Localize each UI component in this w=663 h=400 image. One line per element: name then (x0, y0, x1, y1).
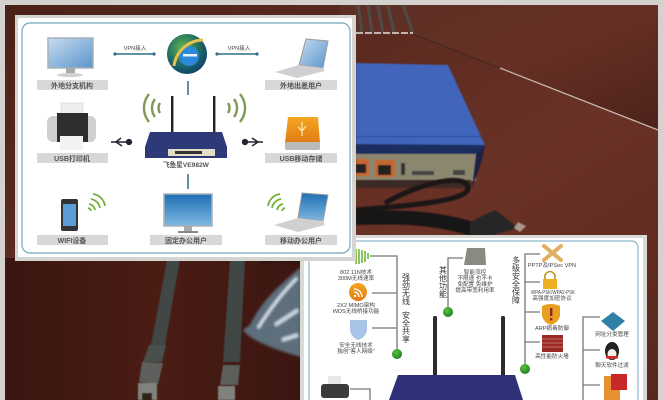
heading: multi-level security: 保 (512, 287, 520, 297)
heading: other functions: 功 (439, 281, 447, 291)
icon: VPN crossed tools (544, 246, 561, 260)
icon: USB printer (47, 103, 96, 150)
heading: strong wireless, safe sharing: 全 (402, 318, 410, 328)
label: router model: 飞鱼星VE982W (163, 160, 210, 169)
icon: security shield (350, 320, 367, 340)
label: wifi device: WIFI设备 (58, 236, 86, 245)
label: USB storage: USB移动存储 (280, 154, 322, 163)
text: URL filter: 网址分类管理 (595, 330, 629, 338)
text: no config: 免配置 免维护 (457, 280, 493, 288)
status dot: security (520, 364, 530, 374)
group: strong wireless features (333, 249, 410, 359)
label: mobile office user (265, 235, 337, 245)
heading: strong wireless, safe sharing: 强 (402, 273, 410, 282)
status dot: wireless (392, 349, 402, 359)
heading: strong wireless, safe sharing: 享 (402, 334, 410, 344)
photo: two antennas (138, 260, 245, 400)
arrow: router to desktop (187, 174, 189, 189)
icon: wifi wedge left (88, 194, 105, 211)
heading: strong wireless, safe sharing: 无 (402, 289, 410, 298)
label: fixed office user (150, 235, 222, 245)
label: fixed office user: 固定办公用户 (165, 236, 207, 245)
label: mobile office user: 移动办公用户 (280, 236, 322, 245)
icon: padlock (543, 272, 557, 289)
heading: strong wireless, safe sharing: 安 (402, 310, 410, 320)
icon: QQ penguin (605, 342, 619, 360)
text: MIMO: 2X2 MIMO架构 (337, 301, 375, 309)
heading: multi-level security: 障 (512, 295, 520, 305)
icon: ARP warning shield (542, 304, 560, 325)
text: 802.11N: 802.11N技术 (340, 268, 372, 276)
icon: USB storage drive (285, 117, 320, 150)
label: wifi device (37, 235, 108, 245)
icon: wifi phone (61, 199, 78, 231)
icon: wifi wedge right (268, 194, 285, 211)
label: USB printer: USB打印机 (54, 154, 90, 163)
icon: wifi waves left (144, 94, 160, 122)
icon: USB symbol right (243, 138, 263, 146)
icon: printer lower diagram (321, 376, 370, 400)
icon: firewall bricks (542, 335, 563, 352)
text: chat filter: 聊天软件过滤 (595, 361, 629, 369)
text: firewall: 高性能防火墙 (535, 352, 569, 360)
arrow: VPN left (113, 44, 156, 56)
heading: other functions: 其 (439, 266, 447, 275)
connector line: other functions (448, 258, 463, 307)
panel: product features diagram (300, 235, 647, 400)
heading: strong wireless, safe sharing: 共 (402, 327, 410, 336)
text: PPTP: PPTP及IPSec VPN (528, 262, 576, 269)
icon: traffic control box (464, 248, 486, 265)
connector lines: management (583, 317, 600, 400)
label: USB storage (265, 153, 337, 163)
text: bandwidth: 提高带宽利用率 (455, 286, 495, 294)
heading: strong wireless, safe sharing: 劲 (402, 280, 410, 290)
panel: network topology diagram (15, 15, 356, 261)
heading: multi-level security: 级 (512, 263, 520, 273)
arrow: VPN right (215, 44, 259, 56)
text: encryption: 高强度加密协议 (532, 294, 572, 302)
heading: strong wireless, safe sharing: 线 (402, 296, 410, 306)
heading: other functions: 能 (439, 289, 447, 299)
icon: flame firewall (604, 374, 627, 400)
text: smart traffic control: 智能流控 (464, 268, 487, 276)
icon: wifi waves right (228, 94, 245, 122)
connector lines: security (525, 254, 540, 364)
arrow: VPN left: VPN接入 (124, 44, 147, 52)
heading: strong wireless, safe sharing (402, 273, 410, 344)
icon: mobile office laptop (274, 193, 328, 232)
label: remote branch: 外地分支机构 (51, 81, 93, 90)
icon: router with antennas (145, 96, 227, 158)
heading: multi-level security: 安 (512, 271, 520, 281)
text: 300M: 300M无线速率 (338, 274, 375, 282)
connector lines: wireless (372, 256, 397, 349)
icon: internet globe (167, 34, 207, 74)
heading: other functions: 他 (439, 273, 447, 283)
photo: cable in plastic bag (243, 259, 301, 357)
label: USB printer (37, 153, 108, 163)
group: other functions (439, 248, 495, 317)
label: remote branch (37, 80, 108, 90)
router illustration: lower diagram (389, 316, 523, 400)
status dot: other functions (443, 307, 453, 317)
icon: travelling user laptop (275, 39, 328, 78)
text: WPA: WPA-PSK/WPA2-PSK (531, 290, 575, 296)
heading: multi-level security: 全 (512, 279, 520, 289)
text: secure wireless: 安全无线技术 (339, 341, 373, 349)
label: travelling user: 外地出差用户 (280, 81, 322, 90)
heading: other functions (439, 266, 447, 299)
group: behaviour management (583, 312, 629, 400)
photo: black power cable and plug (356, 180, 526, 236)
heading: multi-level security (512, 255, 520, 305)
icon: remote branch monitor (48, 38, 93, 77)
photo: blue router box (356, 63, 485, 188)
text: WDS: WDS无线桥接功能 (333, 307, 380, 315)
text: no speed limit: 不限速 也不卡 (457, 274, 493, 282)
text: ARP: ARP病毒防御 (535, 324, 569, 332)
icon: URL filter diamond (601, 312, 625, 331)
icon: fixed office desktop (164, 194, 212, 233)
heading: multi-level security: 多 (512, 255, 520, 265)
icon: RSS wireless badge (349, 283, 367, 301)
icon: green wifi signal (356, 249, 371, 264)
icon: USB symbol left (111, 138, 131, 146)
group: multi-level security (512, 246, 576, 374)
text: guest network: 独创"客人网络" (337, 347, 375, 355)
arrow: VPN right: VPN接入 (228, 44, 251, 52)
arrow: globe to router (187, 81, 189, 95)
label: travelling user (265, 80, 337, 90)
